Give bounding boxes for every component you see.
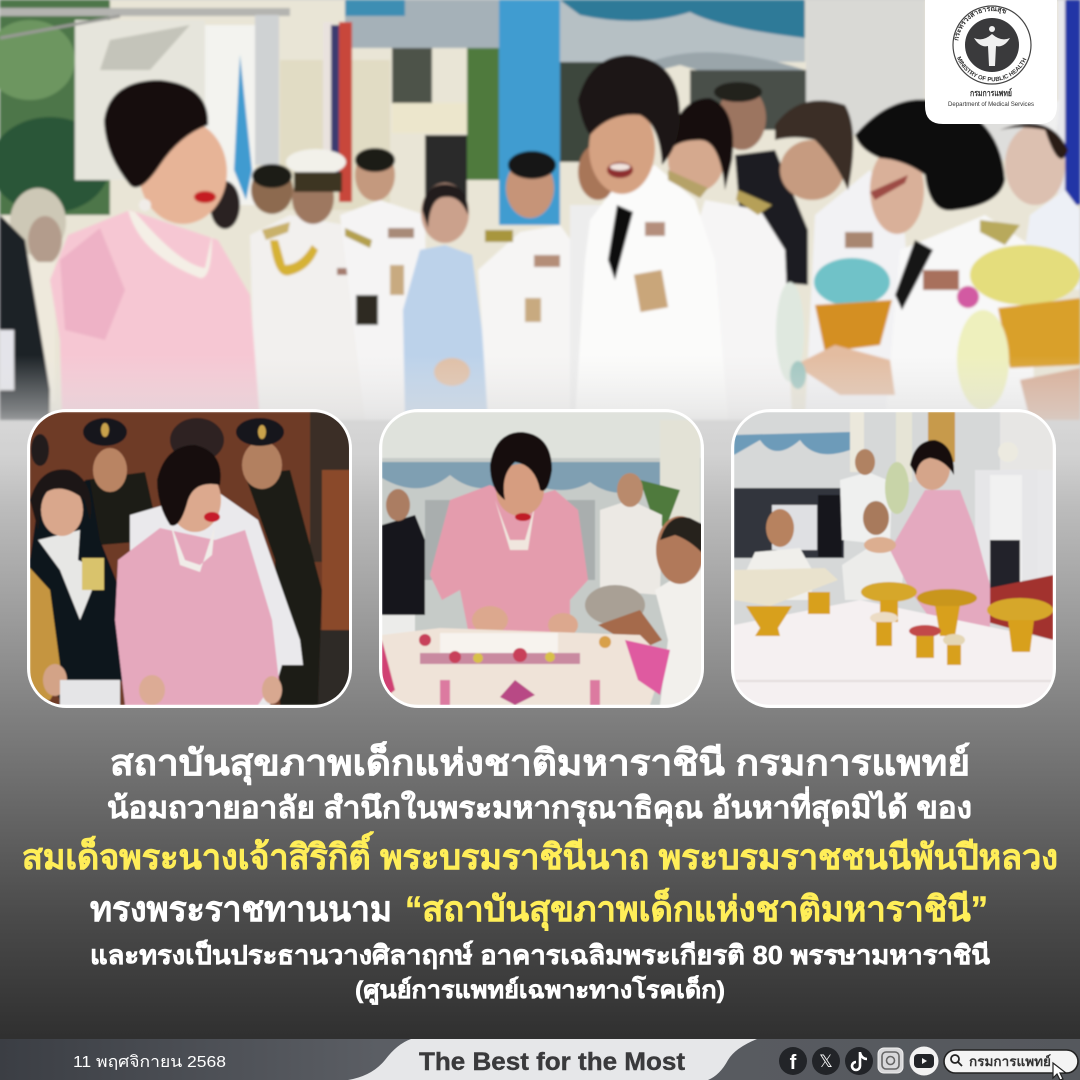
department logo card xyxy=(925,0,1057,124)
hero photo: royal visit with officials in white uniforms xyxy=(0,0,1080,420)
logo caption xyxy=(948,87,1034,108)
officer smiling xyxy=(478,151,585,420)
icon: x: 𝕏 xyxy=(819,1052,833,1071)
card border xyxy=(732,410,1054,706)
photo card: queen at gold offering table xyxy=(732,410,1054,706)
central smiling woman xyxy=(575,55,728,420)
search pill xyxy=(944,1050,1078,1080)
icon: youtube xyxy=(910,1046,938,1076)
text line 6: (ศูนย์การแพทย์เฉพาะทางโรคเด็ก) xyxy=(355,975,725,1005)
photo background: trees and building xyxy=(0,0,1080,420)
card border xyxy=(28,410,350,706)
icon: x xyxy=(812,1047,840,1075)
heading line 1: สถาบันสุขภาพเด็กแห่งชาติมหาราชินี กรมการแพทย์ xyxy=(110,740,970,786)
man behind central woman xyxy=(570,144,618,420)
man in dark suit xyxy=(714,82,808,285)
balding man in white xyxy=(775,100,915,420)
nurse xyxy=(1000,100,1080,290)
offering bowl with yellow flowers xyxy=(957,245,1080,420)
officer with black sash xyxy=(340,148,428,420)
photo card: queen walking with guards xyxy=(28,410,352,706)
search pill: กรมการแพทย์ xyxy=(969,1054,1051,1069)
main announcement text xyxy=(22,740,1058,1005)
card border xyxy=(380,410,702,706)
footer bar xyxy=(0,1039,1080,1080)
footer date: 11 พฤศจิกายน 2568 xyxy=(73,1054,226,1071)
icon: facebook: f xyxy=(790,1052,797,1074)
yellow royal title line: สมเด็จพระนางเจ้าสิริกิติ์ พระบรมราชินีนาถ พระบรมราชชนนีพันปีหลวง xyxy=(22,831,1058,877)
logo caption: Department of Medical Services xyxy=(948,102,1034,108)
curtain and flags xyxy=(234,0,1080,225)
text line 4 yellow part: “สถาบันสุขภาพเด็กแห่งชาติมหาราชินี” xyxy=(405,887,988,931)
icon: facebook xyxy=(779,1047,807,1075)
fade at bottom of hero photo xyxy=(0,355,1080,445)
officer with aiguillette xyxy=(250,149,378,420)
icon: cursor xyxy=(1053,1063,1066,1080)
photo card: queen at floral tray xyxy=(380,410,704,706)
offering bowl with blue flowers xyxy=(776,258,895,395)
footer slogan band: The Best for the Most xyxy=(419,1048,686,1076)
background guests xyxy=(0,164,293,420)
queen in pink lace dress xyxy=(50,80,260,420)
icon: ministry of public health seal: MINISTRY OF PUBLIC HEALTH xyxy=(957,56,1026,82)
woman in uniform with tray xyxy=(855,99,1035,420)
text line 2: น้อมถวายอาลัย สำนึกในพระมหากรุณาธิคุณ อันหาที่สุดมิได้ ของ xyxy=(107,786,972,827)
text line 4 white part: ทรงพระราชทานนาม xyxy=(90,890,392,929)
icon: instagram xyxy=(878,1048,903,1073)
footer slogan band xyxy=(348,1039,757,1080)
text line 5: และทรงเป็นประธานวางศิลาฤกษ์ อาคารเฉลิมพระเกียรติ 80 พรรษามหาราชินี xyxy=(90,939,990,970)
icon: ministry of public health seal: กระทรวงสาธารณสุข xyxy=(954,6,1006,40)
logo caption: กรมการแพทย์ xyxy=(970,87,1012,98)
icon: tiktok xyxy=(845,1047,873,1075)
guest in light blue xyxy=(403,183,492,420)
icon: ministry of public health seal xyxy=(952,5,1032,85)
woman with short hair in white xyxy=(668,98,792,420)
